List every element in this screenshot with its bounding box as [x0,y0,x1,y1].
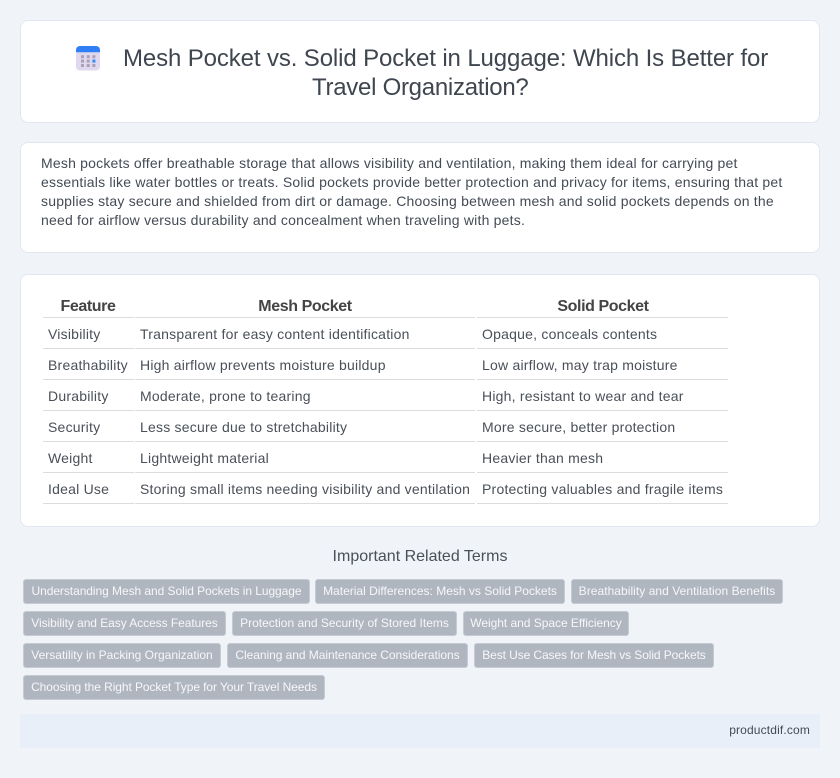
tag: Visibility and Easy Access Features [31,616,218,630]
tag [474,643,714,668]
row: Weight: Lightweight material [140,450,269,466]
table header row: Mesh Pocket [258,298,352,315]
tag [315,579,565,604]
title: Mesh Pocket vs. Solid Pocket in Luggage: Which Is Better for [123,45,768,72]
row: Breathability: Breathability [48,357,128,373]
row: Breathability: Low airflow, may trap moisture [482,357,678,373]
row: Ideal Use [48,481,723,497]
text block: summary paragraph: supplies stay secure and shielded from dirt or damage. Choosing between mesh and solid pockets depends on the [41,193,774,209]
tag [232,611,457,636]
row: Weight [48,450,603,466]
row: Durability [48,388,684,404]
tag: Breathability and Ventilation Benefits [579,584,775,598]
row: Visibility: Visibility [48,326,101,342]
row: Ideal Use: Storing small items needing visibility and ventilation [140,481,470,497]
panel: summary [20,142,820,253]
row: Breathability: High airflow prevents moisture buildup [140,357,386,373]
icon: calendar [76,46,100,70]
row: Durability: High, resistant to wear and tear [482,388,684,404]
row: Security [48,419,675,435]
footer bar [20,714,820,748]
tag: Weight and Space Efficiency [470,616,622,630]
tag: Cleaning and Maintenance Considerations [235,648,460,662]
tag [23,611,226,636]
heading: related terms: Important Related Terms [333,548,507,565]
text block: summary paragraph [41,155,782,228]
tag: Understanding Mesh and Solid Pockets in Luggage [31,584,302,598]
tag [23,643,221,668]
row: Weight: Heavier than mesh [482,450,603,466]
tag: Best Use Cases for Mesh vs Solid Pockets [482,648,706,662]
panel: comparison table [20,274,820,527]
tag: Protection and Security of Stored Items [240,616,449,630]
tag [227,643,468,668]
row: Visibility [48,326,657,342]
panel: header [20,20,820,123]
row: Weight: Weight [48,450,93,466]
row: Durability: Durability [48,388,109,404]
row: Security: More secure, better protection [482,419,675,435]
table header row: Feature [60,298,116,315]
table header row: Solid Pocket [557,298,649,315]
row: Visibility: Opaque, conceals contents [482,326,657,342]
tag [23,579,310,604]
tag [571,579,783,604]
tag: Material Differences: Mesh vs Solid Pockets [323,584,557,598]
row: Security: Less secure due to stretchability [140,419,347,435]
row: Durability: Moderate, prone to tearing [140,388,311,404]
table header row [60,298,649,315]
title [123,45,768,101]
tag [23,675,325,700]
row: Security: Security [48,419,100,435]
tag list [23,579,783,700]
tag: Versatility in Packing Organization [31,648,213,662]
row: Breathability [48,357,678,373]
tag [463,611,629,636]
tag: Choosing the Right Pocket Type for Your Travel Needs [31,680,317,694]
footer text: productdif.com [729,723,810,737]
row: Ideal Use: Ideal Use [48,481,109,497]
row: Visibility: Transparent for easy content identification [140,326,410,342]
title: Travel Organization? [312,74,528,101]
row: Ideal Use: Protecting valuables and fragile items [482,481,723,497]
text block: summary paragraph: need for airflow versus durability and concealment when traveling with pets. [41,212,525,228]
text block: summary paragraph: Mesh pockets offer breathable storage that allows visibility and ventilation, making them ideal for carrying pet [41,155,738,171]
text block: summary paragraph: essentials like water bottles or treats. Solid pockets provide better protection and privacy for items, ensuring that pet [41,174,782,190]
